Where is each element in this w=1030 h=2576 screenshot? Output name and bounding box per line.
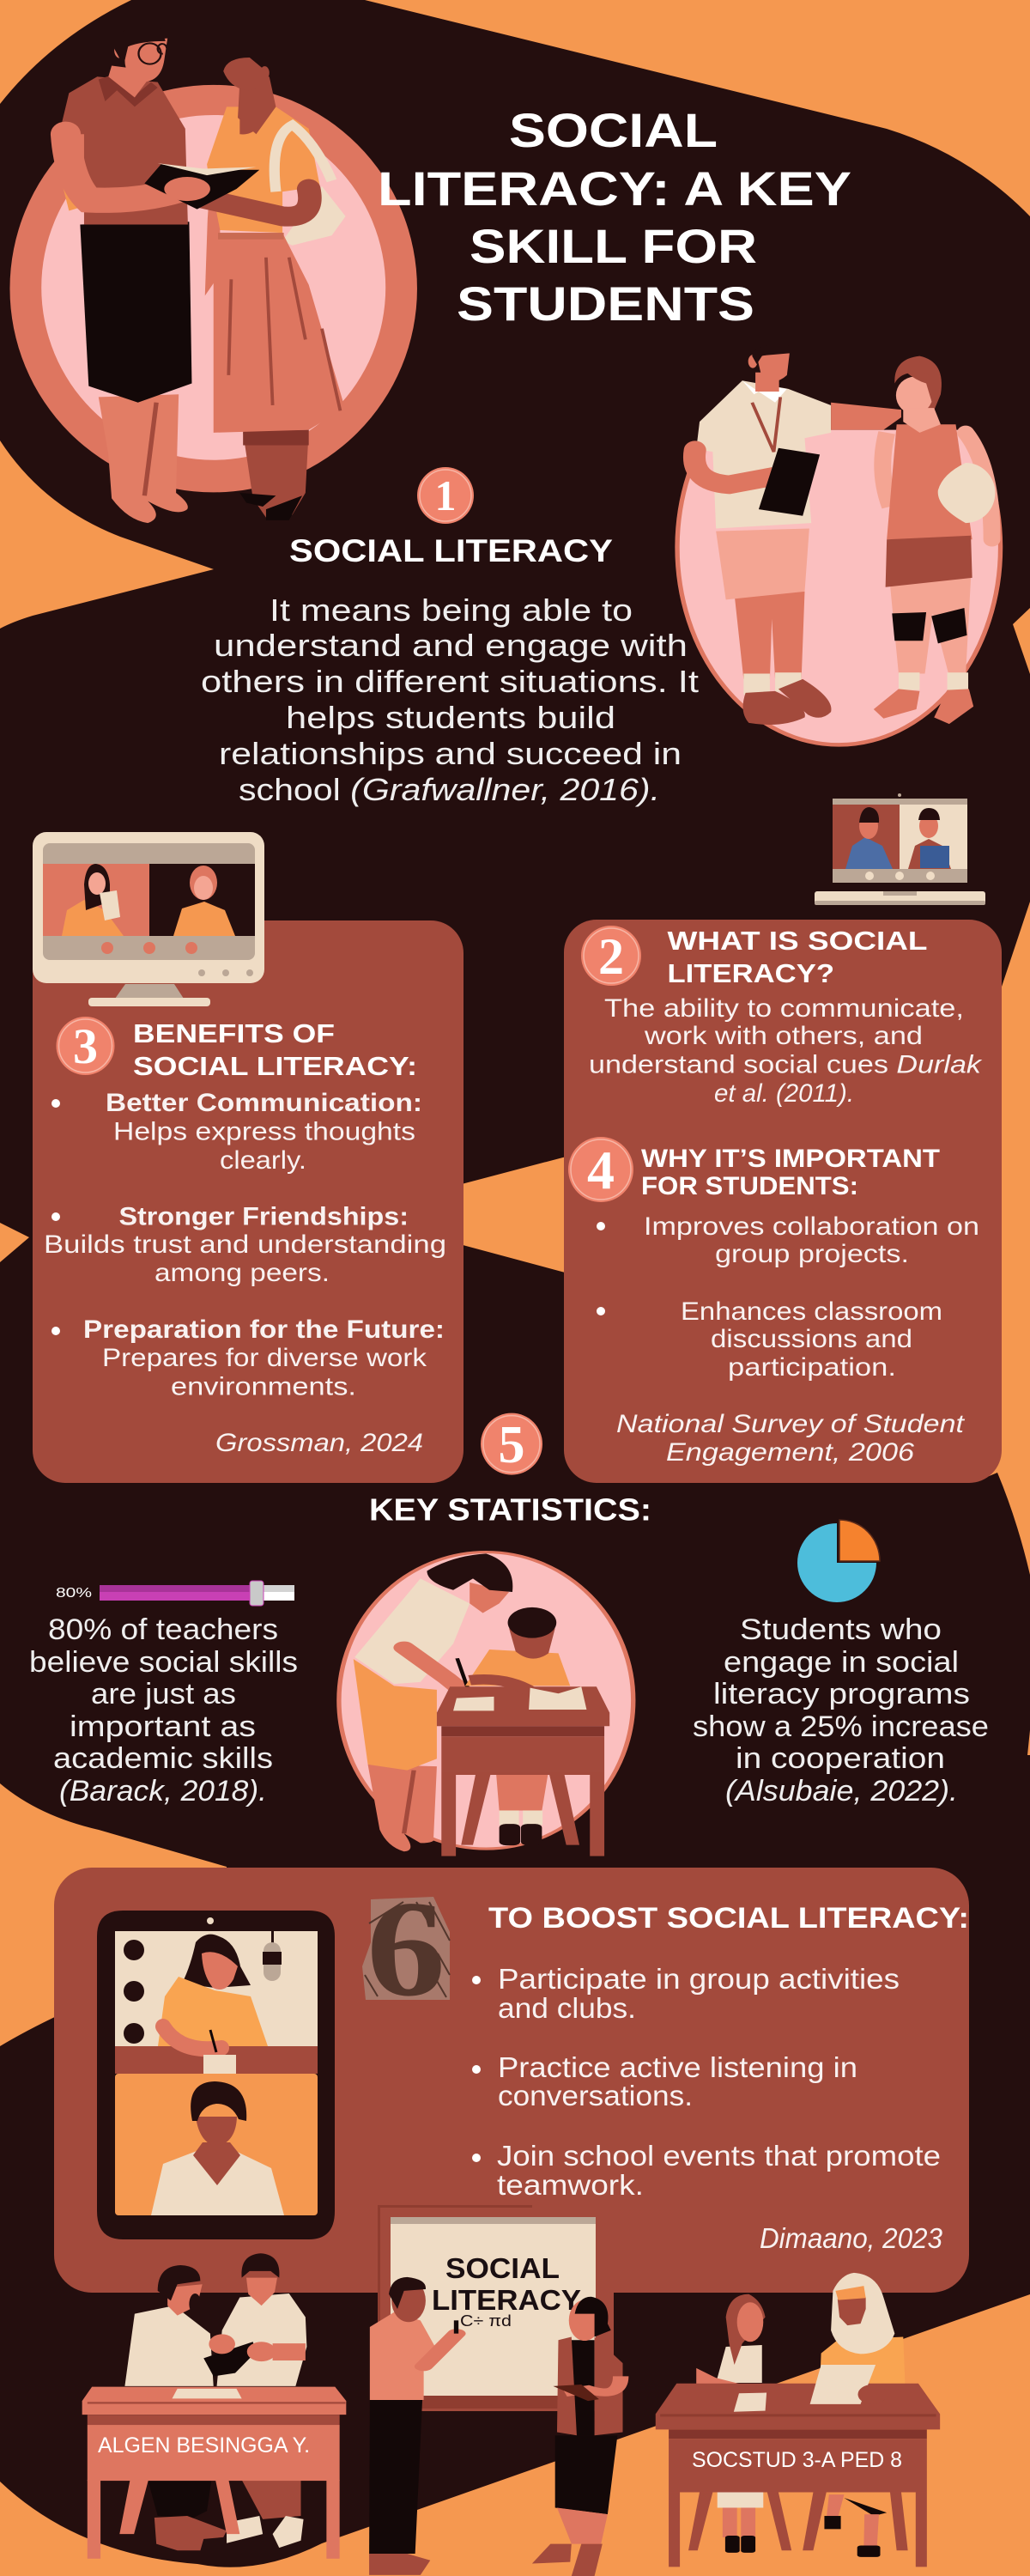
illustration: man writing on board and woman with tablet xyxy=(369,2277,623,2576)
icon: laptop video call xyxy=(815,793,985,905)
badge 4 xyxy=(568,1137,633,1202)
list: why important: Improves collaboration on xyxy=(644,1212,979,1241)
heading: key statistics: KEY STATISTICS: xyxy=(369,1492,651,1527)
illustration: whiteboard: C÷ πd xyxy=(460,2312,512,2330)
citation: national survey xyxy=(616,1410,966,1467)
list: why important xyxy=(597,1212,979,1382)
illustration: whiteboard: SOCIAL xyxy=(445,2252,560,2284)
badge 3 xyxy=(57,1017,115,1075)
text block: teacher statistic: (Barack, 2018). xyxy=(59,1775,267,1807)
title: SKILL FOR xyxy=(470,219,757,273)
title: SOCIAL xyxy=(509,103,718,157)
text block: definition: It means being able to xyxy=(270,592,633,628)
text block: teacher statistic: believe social skills xyxy=(29,1646,298,1679)
badge 1 xyxy=(417,467,474,524)
label: SOCSTUD: SOCSTUD 3-A PED 8 xyxy=(692,2448,902,2472)
text block: definition 2: et al. (2011). xyxy=(714,1079,854,1108)
title: LITERACY: A KEY xyxy=(378,161,851,216)
heading: benefits of social literacy: SOCIAL LITERACY: xyxy=(133,1051,417,1081)
badge 2: 2 xyxy=(598,928,624,985)
list: why important: group projects. xyxy=(715,1240,909,1268)
title xyxy=(378,103,851,331)
list: why important: participation. xyxy=(728,1353,896,1382)
list: tips: teamwork. xyxy=(497,2169,644,2201)
text block: definition: others in different situations. It xyxy=(201,664,699,699)
illustration: teacher helping student at desk xyxy=(339,1552,633,1856)
list: benefits: clearly. xyxy=(220,1146,306,1175)
text block: definition 2: The ability to communicate, xyxy=(604,994,964,1023)
heading: what is social literacy xyxy=(668,926,927,988)
text block: definition xyxy=(201,592,699,807)
panel: benefits xyxy=(33,920,464,1483)
list: tips: and clubs. xyxy=(498,1992,636,2024)
heading: why important: WHY IT’S IMPORTANT xyxy=(641,1145,940,1173)
panel: what is social literacy and why important xyxy=(564,920,1002,1483)
list: benefits: Preparation for the Future: xyxy=(83,1315,445,1344)
citation: Grossman: Grossman, 2024 xyxy=(215,1429,423,1457)
badge 1: 1 xyxy=(434,471,457,519)
illustration: whiteboard xyxy=(378,2205,614,2411)
icon: tablet video call xyxy=(97,1911,335,2239)
citation: national survey: Engagement, 2006 xyxy=(666,1438,914,1467)
list: tips: Participate in group activities xyxy=(498,1963,900,1995)
text block: cooperation statistic: (Alsubaie, 2022). xyxy=(725,1775,958,1807)
badge 5 xyxy=(481,1413,542,1475)
list: benefits: Builds trust and understanding xyxy=(44,1230,446,1259)
list: benefits: among peers. xyxy=(154,1259,330,1287)
list: tips xyxy=(472,1963,941,2201)
badge 2 xyxy=(581,926,641,986)
text block: teacher statistic: important as xyxy=(70,1710,256,1743)
list: benefits: Better Communication: xyxy=(106,1089,422,1117)
heading: why important xyxy=(641,1145,940,1200)
chart: 80 percent slider: 80% xyxy=(56,1586,92,1601)
list: tips: Join school events that promote xyxy=(497,2140,941,2172)
heading: benefits of social literacy xyxy=(133,1018,417,1081)
list: benefits: Prepares for diverse work xyxy=(102,1344,427,1372)
illustration: students at right desk xyxy=(656,2273,940,2567)
illustration: two students at left desk xyxy=(82,2253,346,2559)
label: Algen Besingga: ALGEN BESINGGA Y. xyxy=(98,2433,310,2458)
heading: why important: FOR STUDENTS: xyxy=(641,1172,858,1200)
citation: Dimaano: Dimaano, 2023 xyxy=(760,2222,943,2254)
chart: pie chart 25 percent xyxy=(797,1520,880,1602)
text block: definition: school (Grafwallner, 2016). xyxy=(239,772,660,807)
list: tips: Practice active listening in xyxy=(498,2051,857,2083)
list: benefits xyxy=(44,1089,446,1401)
panel: to boost social literacy xyxy=(54,1868,969,2293)
text block: cooperation statistic: Students who xyxy=(740,1613,942,1646)
list: why important: discussions and xyxy=(711,1325,912,1353)
text block: definition: relationships and succeed in xyxy=(219,736,682,771)
text block: cooperation statistic: show a 25% increase xyxy=(693,1710,989,1743)
list: why important: Enhances classroom xyxy=(681,1297,942,1326)
text block: cooperation statistic: in cooperation xyxy=(736,1742,945,1775)
text block: definition 2 xyxy=(589,994,983,1108)
heading: social literacy: SOCIAL LITERACY xyxy=(289,533,613,568)
icon: number 6 tile: 6 xyxy=(367,1872,445,2025)
list: tips: conversations. xyxy=(498,2080,693,2111)
heading: what is social literacy: WHAT IS SOCIAL xyxy=(668,926,927,956)
icon: desktop monitor video call xyxy=(33,832,264,1006)
text block: teacher statistic: are just as xyxy=(91,1678,236,1710)
text block: teacher statistic xyxy=(29,1613,298,1807)
text block: definition 2: work with others, and xyxy=(644,1022,923,1050)
text block: cooperation statistic: engage in social xyxy=(724,1646,959,1679)
text block: cooperation statistic xyxy=(693,1613,989,1807)
citation: national survey: National Survey of Student xyxy=(616,1410,966,1438)
text block: cooperation statistic: literacy programs xyxy=(713,1678,970,1710)
badge 4: 4 xyxy=(587,1139,615,1200)
illustration: whiteboard: LITERACY xyxy=(432,2284,581,2316)
badge 5: 5 xyxy=(498,1416,525,1474)
title: STUDENTS xyxy=(457,276,754,331)
text block: definition 2: understand social cues Durlak xyxy=(589,1051,983,1078)
heading: benefits of social literacy: BENEFITS OF xyxy=(133,1018,335,1048)
list: benefits: Helps express thoughts xyxy=(113,1118,415,1145)
heading: what is social literacy: LITERACY? xyxy=(668,958,834,988)
text block: definition: helps students build xyxy=(286,700,615,735)
heading: to boost social literacy: TO BOOST SOCIAL LITERACY: xyxy=(488,1902,969,1935)
illustration: two women reading a book xyxy=(9,27,417,523)
text block: teacher statistic: 80% of teachers xyxy=(48,1613,278,1646)
badge 3: 3 xyxy=(73,1018,98,1074)
text block: definition: understand and engage with xyxy=(214,628,688,663)
list: benefits: Stronger Friendships: xyxy=(118,1202,409,1231)
list: benefits: environments. xyxy=(171,1372,356,1401)
illustration: teacher and student with ball xyxy=(677,344,1001,744)
chart: 80 percent slider xyxy=(56,1581,294,1606)
text block: teacher statistic: academic skills xyxy=(53,1742,273,1775)
